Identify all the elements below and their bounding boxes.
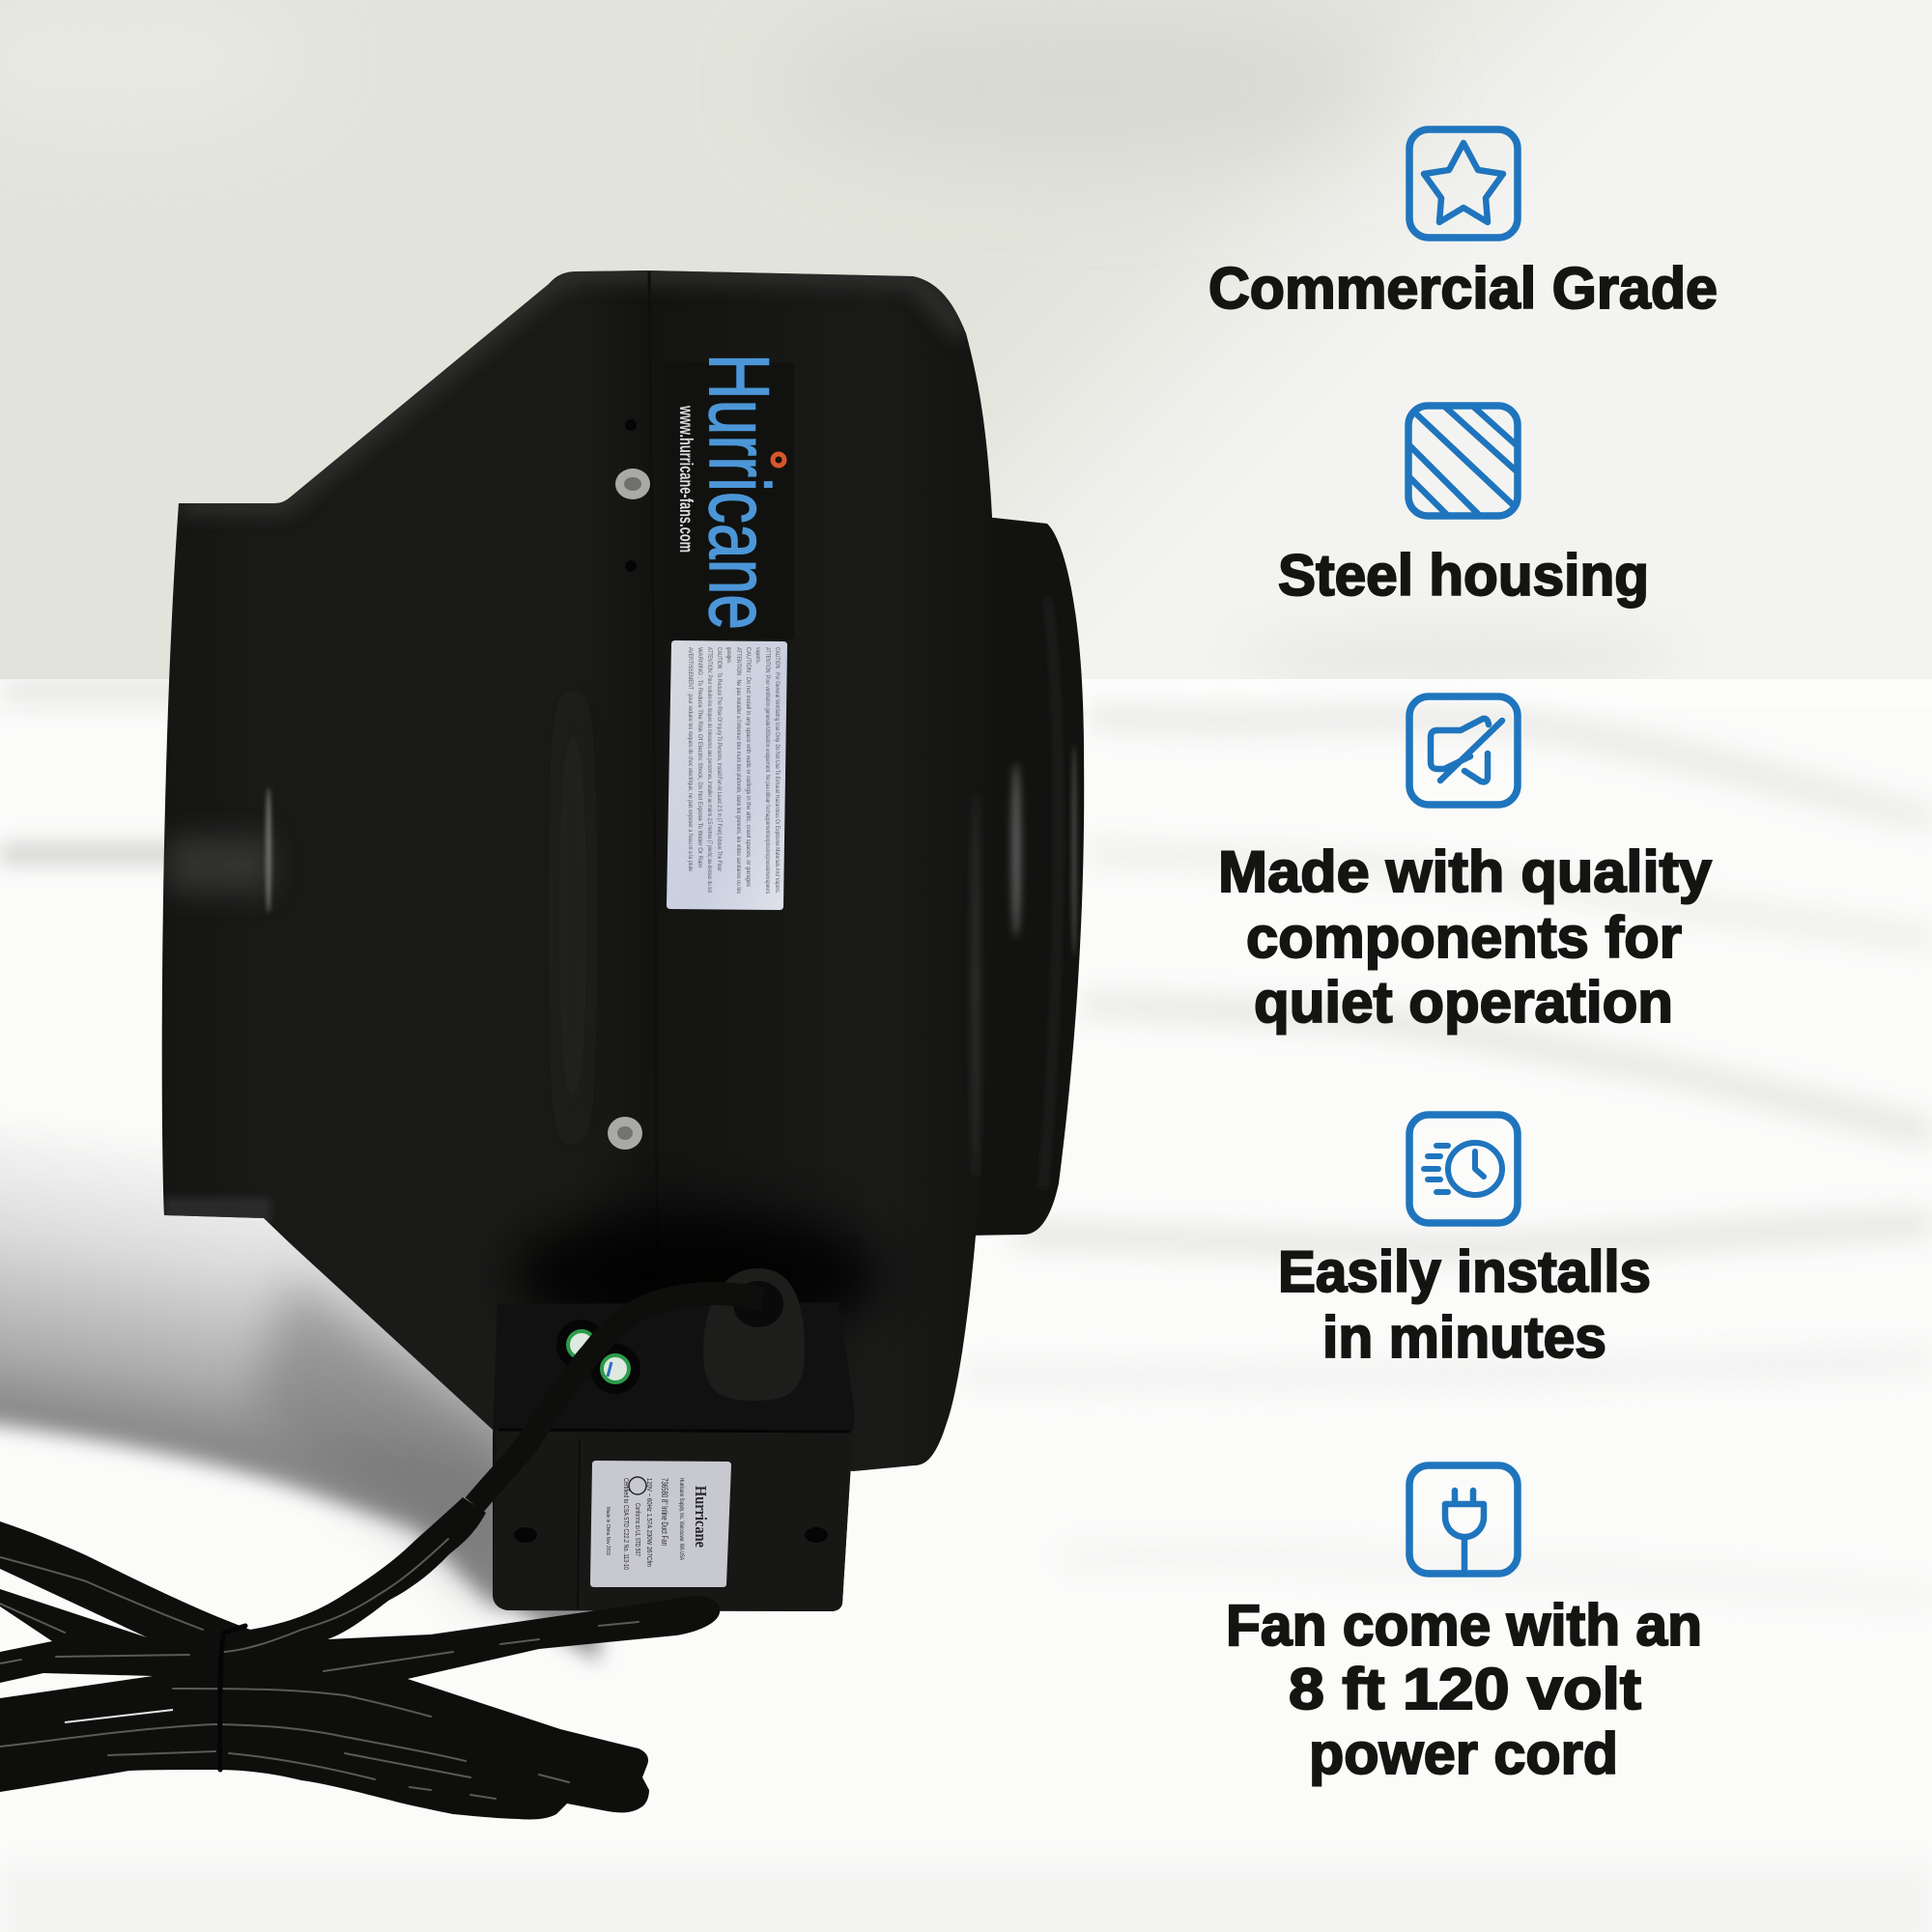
caution label: garages. (725, 647, 732, 664)
feature: commercial grade (1208, 129, 1718, 321)
caution label: AVERTISSEMENT : pour reduire les risques de choc electrique, ne pas exposer a l'eau ni a la pluie (687, 647, 694, 871)
caution label: CAUTION : Do not install in any space with walls or ceilings in the attic, crawl spaces, or garages (745, 647, 752, 888)
caution label: CAUTION : To Reduce The Risk Of Injury To Persons, Install Fan At Least 2.5 m (7 Feet) Above The Floor (716, 647, 723, 872)
website: www.hurricane-fans.com (675, 405, 696, 553)
heading: Steel housing (1278, 543, 1649, 608)
feature: easy install: in minutes (1322, 1305, 1606, 1370)
heading: Easily installs (1278, 1239, 1651, 1304)
icon: fast clock badge (1409, 1115, 1518, 1223)
heading: Commercial Grade (1208, 256, 1718, 321)
caution label: ATTENTION : Ne pas installer a l'interieur des murs des plafonds, dans les greniers, les vides sanitaires ou les (735, 647, 742, 895)
cord highlights (0, 1539, 639, 1799)
icon: plug badge (1409, 1465, 1518, 1574)
screws and holes (608, 419, 650, 1150)
icon: muted speaker badge (1409, 696, 1518, 805)
fan housing (162, 270, 994, 1471)
coiled bundle silhouette (0, 1497, 720, 1819)
feature: quiet operation: quiet operation (1254, 970, 1673, 1035)
junction box (493, 1268, 855, 1611)
icon: UL mark (629, 1477, 646, 1494)
feature: power cord: power cord (1309, 1721, 1618, 1786)
logo sticker (665, 354, 794, 639)
icon: star badge (1409, 129, 1518, 238)
floor shadow under fan (0, 1082, 599, 1662)
mounting holes (514, 1527, 828, 1543)
rating label: Hurricane (692, 1486, 710, 1548)
caution label: vapors. (754, 647, 761, 664)
rating label: Conforms to UL STD 507 (634, 1503, 640, 1556)
cord lead into strain relief (474, 1293, 763, 1505)
feature: easy install (1278, 1115, 1651, 1370)
zip tie (220, 1626, 245, 1770)
caution label: WARNING : To Reduce The Risk Of Electric Shock, Do Not Expose To Water Or Rain (696, 647, 703, 867)
rating label (590, 1461, 731, 1587)
feature: steel housing (1278, 400, 1649, 608)
icon: logo swirl (773, 454, 784, 466)
heading: Fan come with an (1226, 1593, 1702, 1658)
caution label: ATTENTION: Pour reduire les risques de blessures aux personnes, installer au moins 2,5 metres (7 pieds) au-dessus du sol (706, 647, 713, 893)
strain relief (703, 1268, 805, 1401)
rating label: Hurricane Supply, Inc. Vancouver, WA USA (678, 1478, 684, 1560)
logo wordmark: Hurricane (692, 354, 787, 630)
power cord (0, 1293, 763, 1819)
caution label: ATTENTION: Pour ventilation generale/Utilisation uniquement. Ne pas utiliser l'echappement/explosion/poussiere/vapeurs (764, 647, 771, 894)
feature: quiet operation: components for (1246, 905, 1682, 970)
gap glint (65, 1710, 173, 1722)
right outlet duct (971, 517, 1084, 1236)
rating label: 736580 8" Inline Duct Fan (660, 1478, 669, 1546)
rating label: Certified to CSA STD C22.2 No. 113-10 (622, 1478, 629, 1570)
heading: Made with quality (1218, 839, 1713, 904)
icon: striped steel badge (1401, 400, 1526, 522)
terminal grommets (556, 1320, 640, 1394)
fan (162, 270, 1084, 1478)
caution label (667, 640, 787, 910)
feature: power cord: 8 ft 120 volt (1289, 1657, 1641, 1721)
rating label: 120V ~ 60Hz 1.57A 230W 267Cfm (645, 1478, 652, 1567)
feature: power cord (1226, 1465, 1702, 1786)
rating label: Made In China Nov 2015 (605, 1507, 611, 1555)
caution label: CAUTION : For General Ventilating Use Only. Do Not Use To Exhaust Hazardous Or Explosive Materials And Vapors. (774, 647, 781, 894)
feature: quiet operation (1218, 696, 1713, 1035)
